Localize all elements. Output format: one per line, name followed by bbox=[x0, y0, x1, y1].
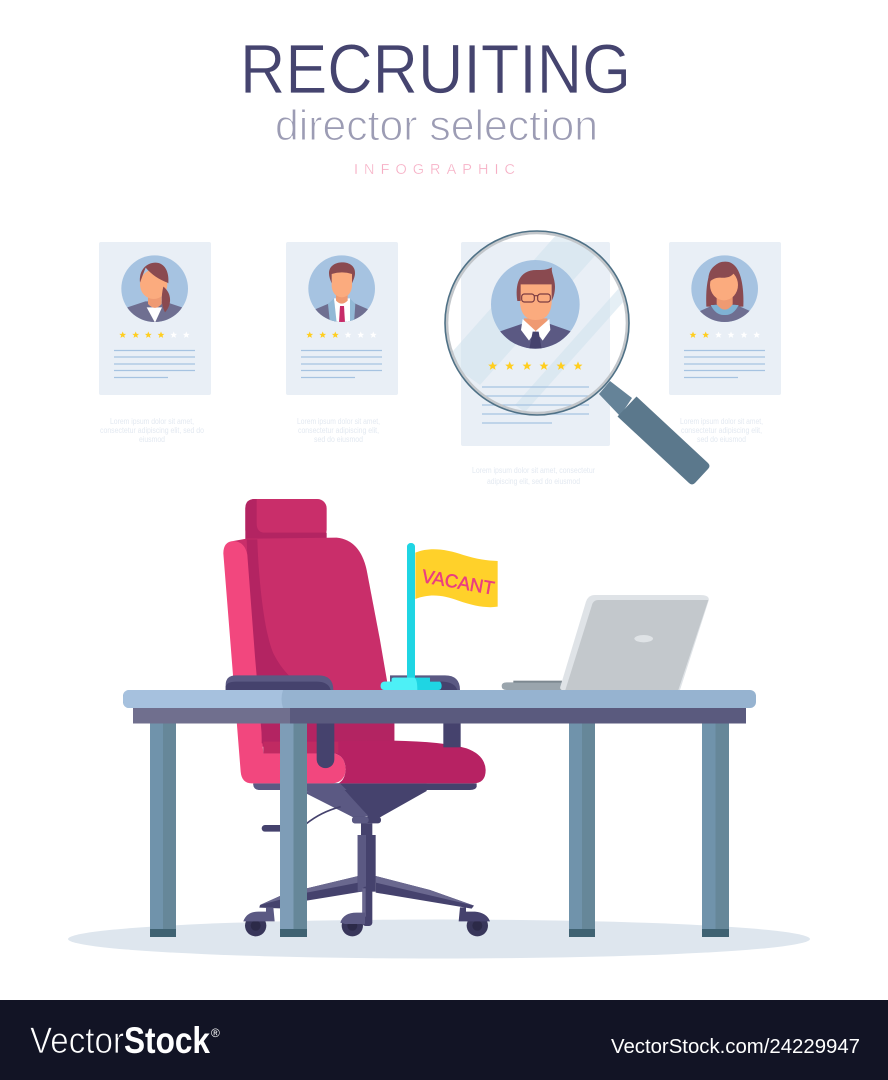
lens glare streaks bbox=[453, 236, 623, 411]
text lines bbox=[684, 350, 765, 378]
panel: candidate card 2 bbox=[286, 242, 398, 395]
chair base and casters bbox=[243, 783, 490, 936]
caption 2 bbox=[297, 417, 380, 444]
panel: candidate card 3, selected bbox=[453, 236, 623, 446]
caption 2: sed do eiusmod bbox=[314, 435, 363, 444]
armrests bbox=[226, 675, 460, 690]
caption 2: Lorem ipsum dolor sit amet, bbox=[297, 417, 380, 426]
caption 4: sed do eiusmod bbox=[697, 435, 746, 444]
footer logo: Vector bbox=[30, 1020, 124, 1061]
desk bbox=[123, 690, 756, 937]
text lines bbox=[482, 387, 589, 423]
caption 3: adipiscing elit, sed do eiusmod bbox=[487, 477, 580, 486]
laptop bbox=[502, 595, 709, 690]
panel: candidate card 1 bbox=[99, 242, 211, 395]
panel: candidate card 4 bbox=[669, 242, 781, 395]
star rating: 2 of 6 bbox=[690, 332, 760, 338]
title bbox=[240, 30, 631, 178]
title: INFOGRAPHIC bbox=[354, 162, 515, 178]
star rating: 6 of 6 bbox=[488, 361, 582, 370]
office chair bbox=[223, 499, 490, 936]
caption 1: consectetur adipiscing elit, sed do bbox=[100, 426, 204, 435]
desktop surface bbox=[133, 708, 746, 724]
title: director selection bbox=[275, 102, 598, 150]
caption 2: consectetur adipiscing elit, bbox=[298, 426, 379, 435]
footer image id: VectorStock.com/24229947 bbox=[611, 1036, 860, 1058]
flag cloth bbox=[415, 549, 498, 607]
footer logo: Stock bbox=[124, 1020, 210, 1061]
armrest posts bbox=[317, 723, 461, 768]
avatar: woman with ponytail bbox=[121, 255, 188, 327]
title: RECRUITING bbox=[240, 30, 631, 108]
footer logo: ® bbox=[211, 1026, 220, 1040]
avatar: man with glasses bbox=[491, 260, 580, 352]
caption 1 bbox=[100, 417, 204, 444]
caption 4: Lorem ipsum dolor sit amet, bbox=[680, 417, 763, 426]
caption 4 bbox=[680, 417, 763, 444]
star rating: 3 of 6 bbox=[306, 332, 377, 338]
caption 1: Lorem ipsum dolor sit amet, bbox=[110, 417, 194, 426]
star rating: 4 of 6 bbox=[119, 332, 190, 338]
icon: magnifying glass bbox=[445, 231, 710, 484]
flag pole and base bbox=[381, 543, 442, 690]
floor shadow bbox=[68, 920, 810, 958]
caption 1: eiusmod bbox=[139, 435, 165, 444]
caption 4: consectetur adipiscing elit, bbox=[681, 426, 762, 435]
avatar: man with red tie bbox=[308, 255, 375, 327]
footer logo bbox=[30, 1020, 220, 1061]
text lines bbox=[301, 350, 382, 378]
flag label: VACANT bbox=[420, 565, 496, 599]
footer band bbox=[0, 1000, 888, 1080]
avatar: woman with long hair bbox=[691, 255, 758, 325]
flag: vacant bbox=[381, 543, 498, 690]
desk legs bbox=[150, 723, 729, 937]
seat and backrest bbox=[223, 499, 486, 790]
caption 3 bbox=[472, 466, 595, 486]
caption 3: Lorem ipsum dolor sit amet, consectetur bbox=[472, 466, 595, 475]
text lines bbox=[114, 350, 195, 378]
